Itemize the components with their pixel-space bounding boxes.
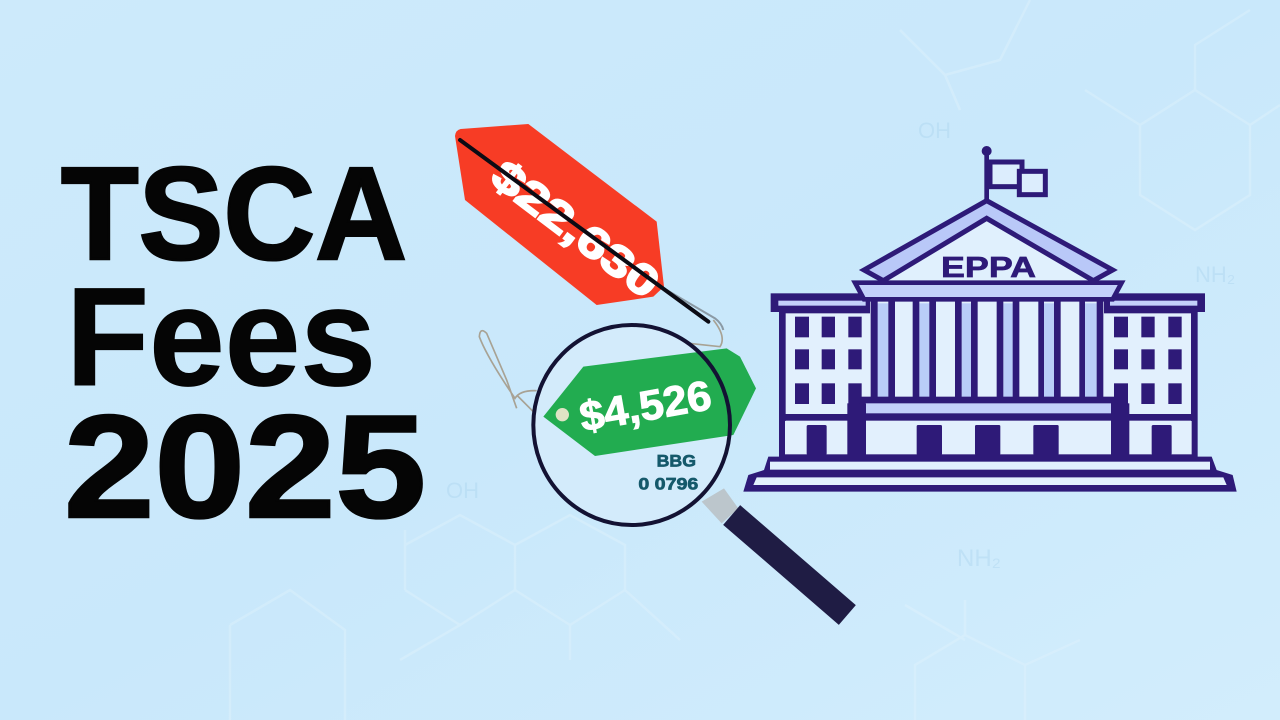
central beam — [785, 397, 1195, 421]
agency label: EPPA — [941, 252, 1036, 284]
pediment — [864, 201, 1113, 282]
background molecule pattern: OH — [918, 118, 951, 143]
lens glass — [533, 325, 730, 525]
lens rim — [533, 325, 730, 525]
wire — [667, 290, 723, 330]
ferrule — [702, 488, 738, 523]
small magnified text: BBG — [657, 452, 696, 471]
magnifier and green price tag — [479, 320, 847, 615]
new price: $4,526 — [576, 371, 715, 441]
background molecule pattern: NH₂ — [957, 545, 1001, 572]
EPA building — [743, 146, 1237, 492]
green tag — [543, 348, 756, 456]
colonnade — [870, 300, 1104, 398]
string loop — [479, 320, 722, 417]
strike line — [460, 140, 708, 322]
windows — [795, 317, 1182, 404]
background molecule pattern: OH — [446, 478, 479, 503]
side wings — [771, 293, 1205, 457]
background molecule pattern: NH₂ — [1195, 262, 1235, 287]
ground floor — [785, 403, 1192, 455]
red price tag, struck through — [455, 124, 723, 330]
title line: TSCA: TSCA — [61, 140, 407, 287]
flag — [982, 146, 1045, 202]
cornice — [855, 283, 1122, 299]
steps — [743, 457, 1237, 492]
handle — [732, 515, 847, 615]
title — [61, 140, 426, 548]
small magnified digits: 0 0796 — [638, 474, 698, 493]
old price: $22,630 — [482, 151, 668, 308]
title line: 2025: 2025 — [64, 385, 426, 548]
title line: Fees: Fees — [66, 258, 376, 415]
tag eyelet — [556, 408, 569, 421]
tag body — [455, 124, 664, 305]
